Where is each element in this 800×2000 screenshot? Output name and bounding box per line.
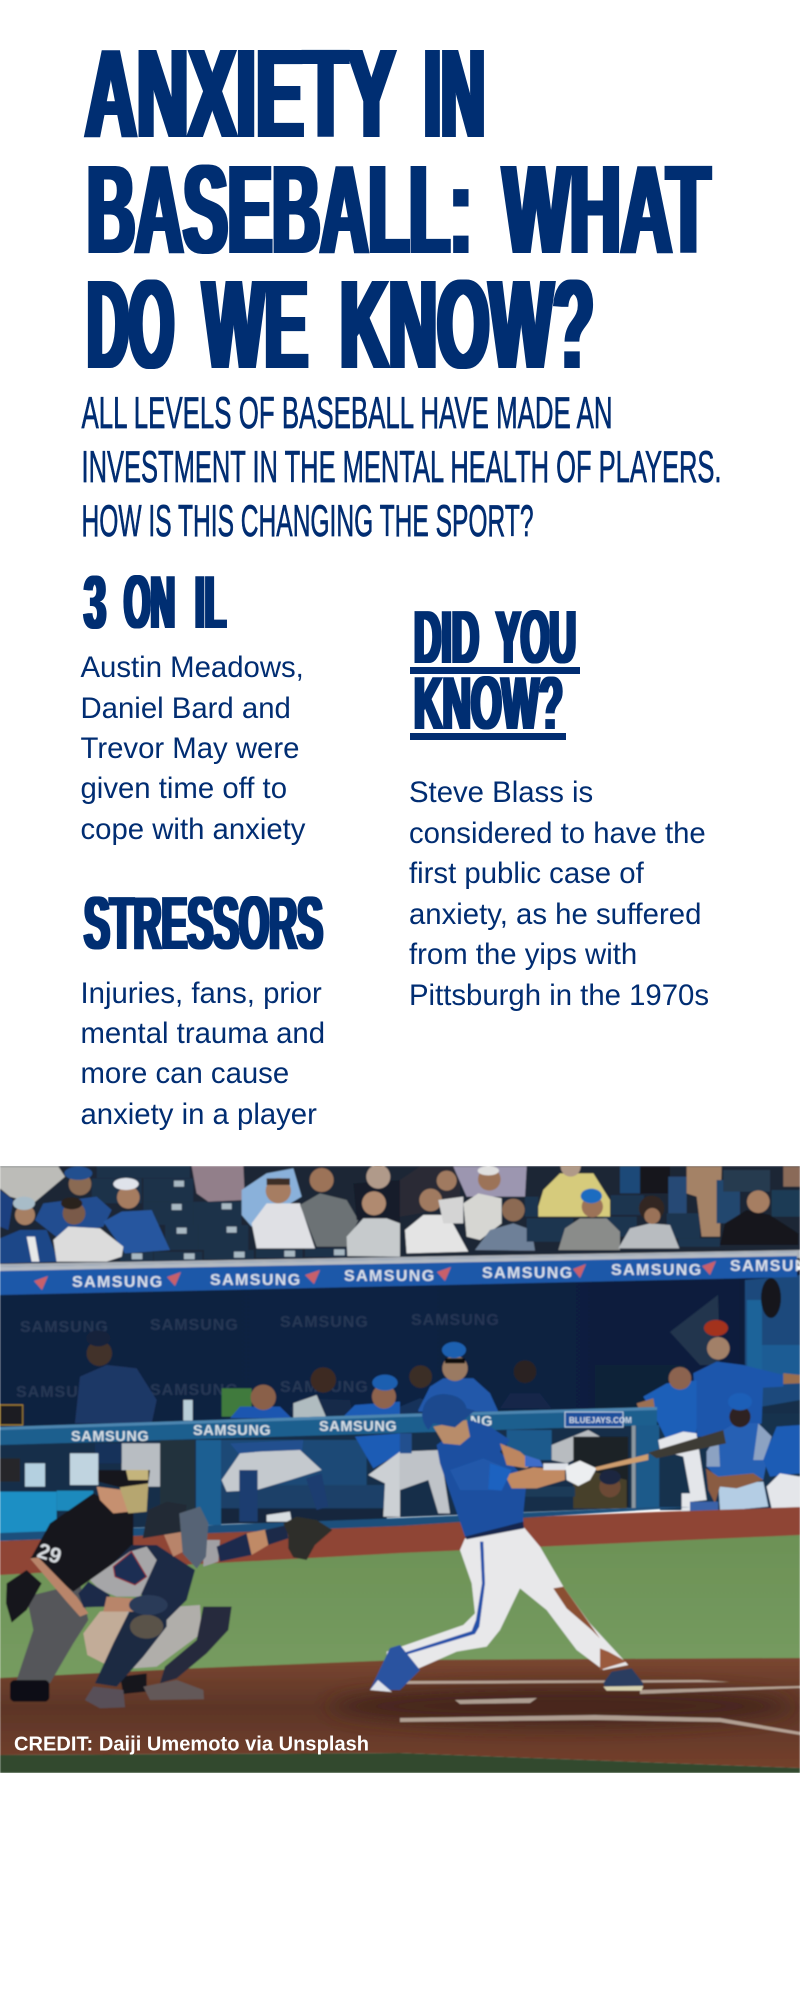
- text block: did you know body: considered to have the: [409, 817, 706, 850]
- dugout under the rail: [0, 1367, 800, 1533]
- heading: stressors: STRESSORS: [84, 881, 323, 965]
- umpire: 29: [34, 1539, 65, 1569]
- title: ANXIETY: [85, 23, 395, 164]
- dugout interior: [0, 1269, 800, 1446]
- title: WE: [203, 254, 308, 395]
- text block: did you know body: from the yips with: [409, 938, 637, 971]
- catcher and umpire: [6, 1470, 332, 1708]
- panel: 3 on IL: IL: [195, 560, 226, 644]
- stadium banner: SAMSUNG: [72, 1274, 164, 1291]
- title: DO: [87, 254, 174, 395]
- bluejays.com rail sign: [565, 1412, 632, 1427]
- text block: stressors body: mental trauma and: [80, 1017, 325, 1050]
- text block: 3 on IL body: given time off to: [80, 772, 287, 805]
- text block: 3 on IL body: cope with anxiety: [80, 813, 306, 846]
- dugout interior: SAMSUNG: [280, 1379, 369, 1396]
- camera: [761, 1278, 781, 1318]
- photo: batter swinging at a baseball game: [0, 1157, 800, 1773]
- chalk lines and home plate: [400, 1680, 800, 1735]
- text block: did you know body: first public case of: [409, 857, 645, 890]
- title: [85, 23, 710, 395]
- dugout interior: SAMSUNG: [280, 1314, 369, 1331]
- players behind the rail: [0, 1322, 800, 1430]
- panel: 3 on IL: [80, 560, 306, 846]
- text block: 3 on IL body: Daniel Bard and: [80, 692, 291, 725]
- text block: did you know body: Pittsburgh in the 1970s: [409, 979, 709, 1012]
- stadium banner: SAMSUNG: [482, 1265, 574, 1282]
- heading: did you know: [410, 595, 580, 745]
- title: BASEBALL:: [87, 139, 472, 280]
- stands: [0, 1157, 800, 1266]
- heading: 3 on IL: ON: [124, 560, 175, 644]
- text block: did you know body: anxiety, as he suffered: [409, 898, 701, 931]
- dugout interior: SAMSUNG: [20, 1319, 109, 1336]
- stadium banner: SAMSUNG: [344, 1268, 436, 1285]
- heading: 3 on IL: 3: [84, 560, 106, 644]
- text block: stressors body: anxiety in a player: [80, 1098, 317, 1131]
- dugout under the rail: SAMSUNG: [193, 1423, 271, 1439]
- dugout rail: [0, 1407, 657, 1445]
- blue jays logo on dugout wall: [670, 1295, 720, 1365]
- batter: [370, 1394, 726, 1692]
- text block: 3 on IL body: Trevor May were: [80, 732, 299, 765]
- bluejays.com rail sign: BLUEJAYS.COM: [569, 1416, 632, 1425]
- dugout interior: SAMSUNG: [411, 1312, 500, 1329]
- text block: did you know body: Steve Blass is: [409, 776, 593, 809]
- heading: did you know: KNOW?: [414, 661, 563, 745]
- text block: stressors body: Injuries, fans, prior: [80, 977, 322, 1010]
- umpire: [6, 1470, 150, 1702]
- stadium banner: SAMSUNG: [611, 1262, 703, 1279]
- dugout under the rail: SAMSUNG: [71, 1429, 149, 1445]
- dugout under the rail: NG: [470, 1414, 493, 1430]
- text block: 3 on IL body: Austin Meadows,: [80, 651, 304, 684]
- catcher: [78, 1502, 332, 1708]
- image credit: CREDIT: Daiji Umemoto via Unsplash: [14, 1734, 369, 1756]
- title: IN: [424, 23, 485, 164]
- text block: 3 on IL body: [80, 651, 306, 846]
- heading: did you know: YOU: [496, 595, 576, 679]
- dugout under the rail: SAMSUNG: [319, 1419, 397, 1435]
- field: clay, grass, dirt: [0, 1507, 800, 1773]
- dugout interior: SAMSUNG: [16, 1384, 105, 1401]
- text block: stressors body: more can cause: [80, 1057, 289, 1090]
- dugout interior: SAMSUNG: [150, 1317, 239, 1334]
- stadium banner: [0, 1250, 800, 1295]
- stadium banner: SAMSUNG: [210, 1272, 302, 1289]
- text block: stressors body: [80, 977, 325, 1131]
- dugout interior: SAMSUNG: [150, 1382, 239, 1399]
- heading: did you know: DID: [414, 595, 479, 679]
- text block: did you know body: [409, 776, 709, 1012]
- panel: did you know: [409, 595, 709, 1012]
- subtitle: [82, 389, 722, 546]
- panel: stressors: [80, 881, 325, 1131]
